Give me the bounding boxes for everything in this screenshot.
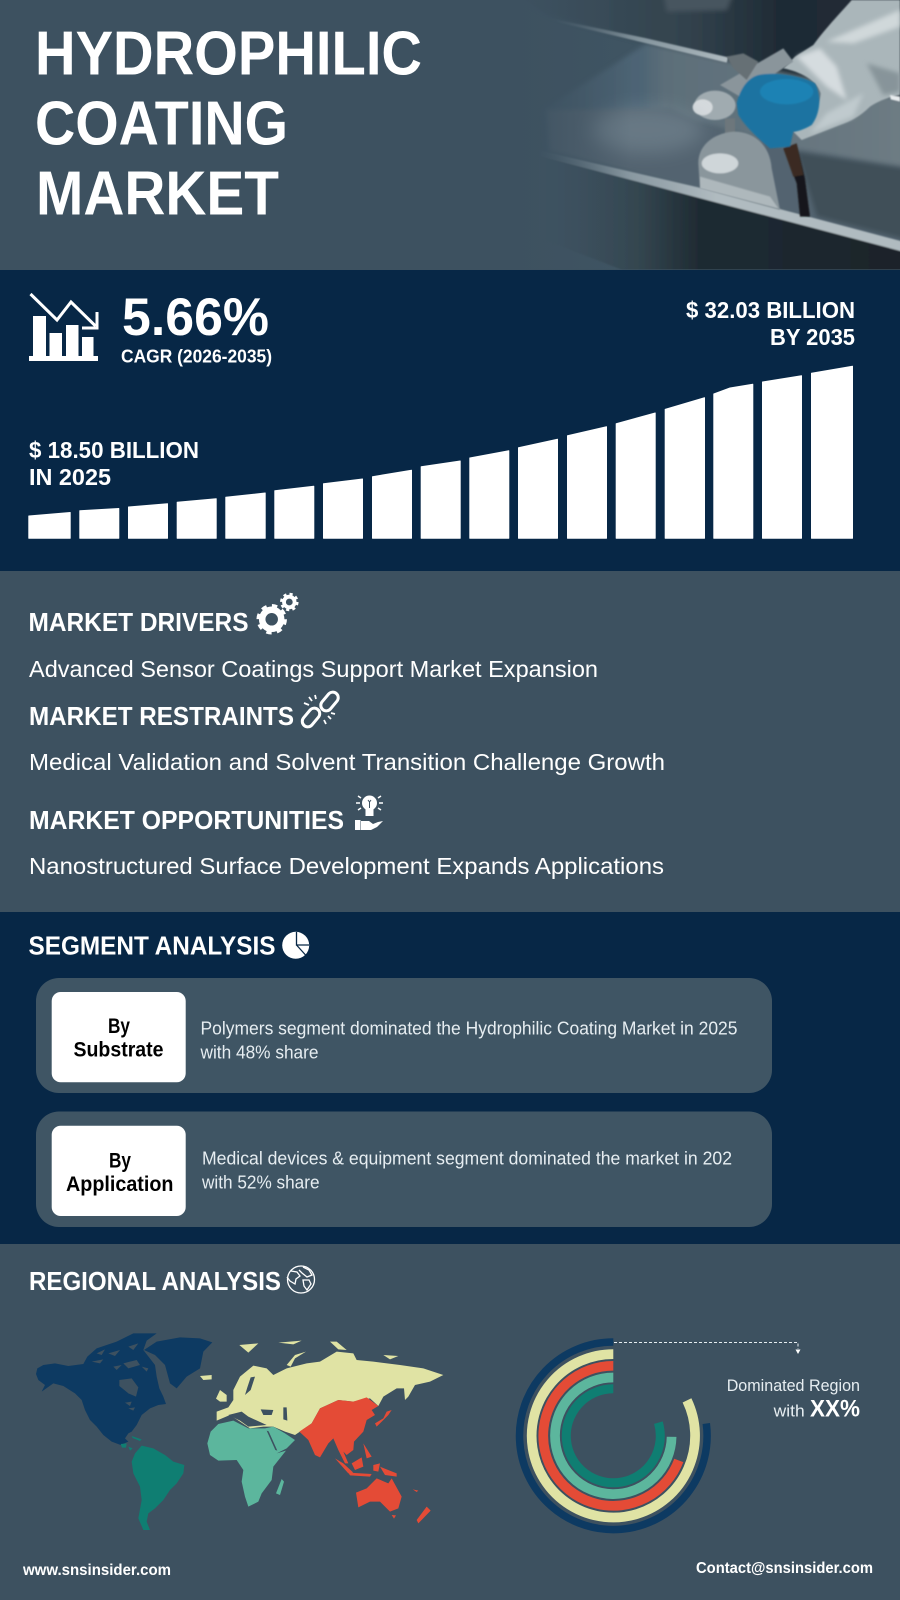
icon: broken chain [300, 690, 340, 729]
callout: dominated region: Dominated Region [727, 1377, 860, 1395]
panel: market size [0, 270, 900, 571]
2035 value: $ 32.03 BILLION [686, 297, 855, 323]
heading: regional analysis: REGIONAL ANALYSIS [29, 1266, 281, 1296]
text: application finding: with 52% share [201, 1171, 320, 1192]
arctic and hudson bay gaps [92, 1343, 148, 1411]
text: substrate finding: with 48% share [200, 1041, 318, 1062]
CAGR value: 5.66% [122, 288, 269, 347]
region: north america [36, 1333, 212, 1445]
heading: market drivers: MARKET DRIVERS [28, 607, 248, 637]
heading: market restraints: MARKET RESTRAINTS [29, 701, 294, 731]
photo: gloved hand spraying coating [450, 0, 900, 277]
panel: drivers, restraints, opportunities [0, 571, 900, 912]
card: by substrate [36, 978, 772, 1093]
heading: market opportunities: MARKET OPPORTUNITIES [29, 805, 344, 835]
label box: by substrate: By [108, 1015, 130, 1038]
region: africa and middle east [207, 1421, 295, 1507]
card: by application [36, 1112, 772, 1227]
label box: by application: Application [66, 1173, 174, 1196]
text: substrate finding [200, 1017, 738, 1062]
CAGR label: CAGR (2026-2035) [121, 346, 272, 366]
panel: header [0, 0, 900, 277]
label box: by application [52, 1126, 186, 1216]
2025 value [29, 437, 199, 490]
bar chart: market growth [29, 366, 853, 538]
footer: contact: Contact@snsinsider.com [696, 1560, 873, 1577]
title: COATING [35, 90, 288, 158]
title: MARKET [36, 160, 279, 228]
text: application finding [201, 1147, 732, 1192]
panel: regional analysis [0, 1244, 900, 1600]
icon: chart with trend arrow [29, 294, 98, 361]
callout: dominated region: with [773, 1402, 805, 1420]
radial bar chart [520, 1342, 707, 1530]
title: HYDROPHILIC [35, 20, 422, 88]
footer: website: www.snsinsider.com [22, 1562, 171, 1579]
2035 value [686, 297, 855, 350]
callout: dominated region [727, 1377, 860, 1422]
world map [36, 1333, 443, 1530]
label box: by application: By [109, 1150, 131, 1172]
inland seas [228, 1377, 287, 1427]
heading: segment analysis: SEGMENT ANALYSIS [28, 930, 276, 960]
region: europe and north asia [200, 1341, 443, 1435]
2035 value: BY 2035 [770, 324, 855, 350]
text: substrate finding: Polymers segment dominated the Hydrophilic Coating Market in 2025 [200, 1017, 738, 1038]
text: driver: Advanced Sensor Coatings Support Market Expansion [29, 656, 598, 682]
label box: by substrate: Substrate [74, 1038, 164, 1062]
callout: dominated region: XX% [810, 1396, 860, 1422]
title [35, 20, 422, 228]
arrow: dashed leader line [614, 1342, 800, 1354]
2025 value: IN 2025 [29, 464, 111, 490]
icon: pie chart [282, 932, 309, 959]
icon: globe [287, 1266, 314, 1293]
2025 value: $ 18.50 BILLION [29, 437, 199, 463]
region: south america [121, 1436, 184, 1530]
text: restraint: Medical Validation and Solvent Transition Challenge Growth [29, 749, 665, 775]
panel: segment analysis [0, 912, 900, 1244]
label box: by substrate [52, 992, 186, 1082]
text: opportunity: Nanostructured Surface Development Expands Applications [29, 853, 664, 879]
text: application finding: Medical devices & equipment segment dominated the market in 202 [202, 1147, 732, 1168]
icon: gears [258, 594, 297, 633]
icon: hand with light bulb [355, 796, 383, 830]
region: south and east asia, oceania [299, 1397, 431, 1523]
